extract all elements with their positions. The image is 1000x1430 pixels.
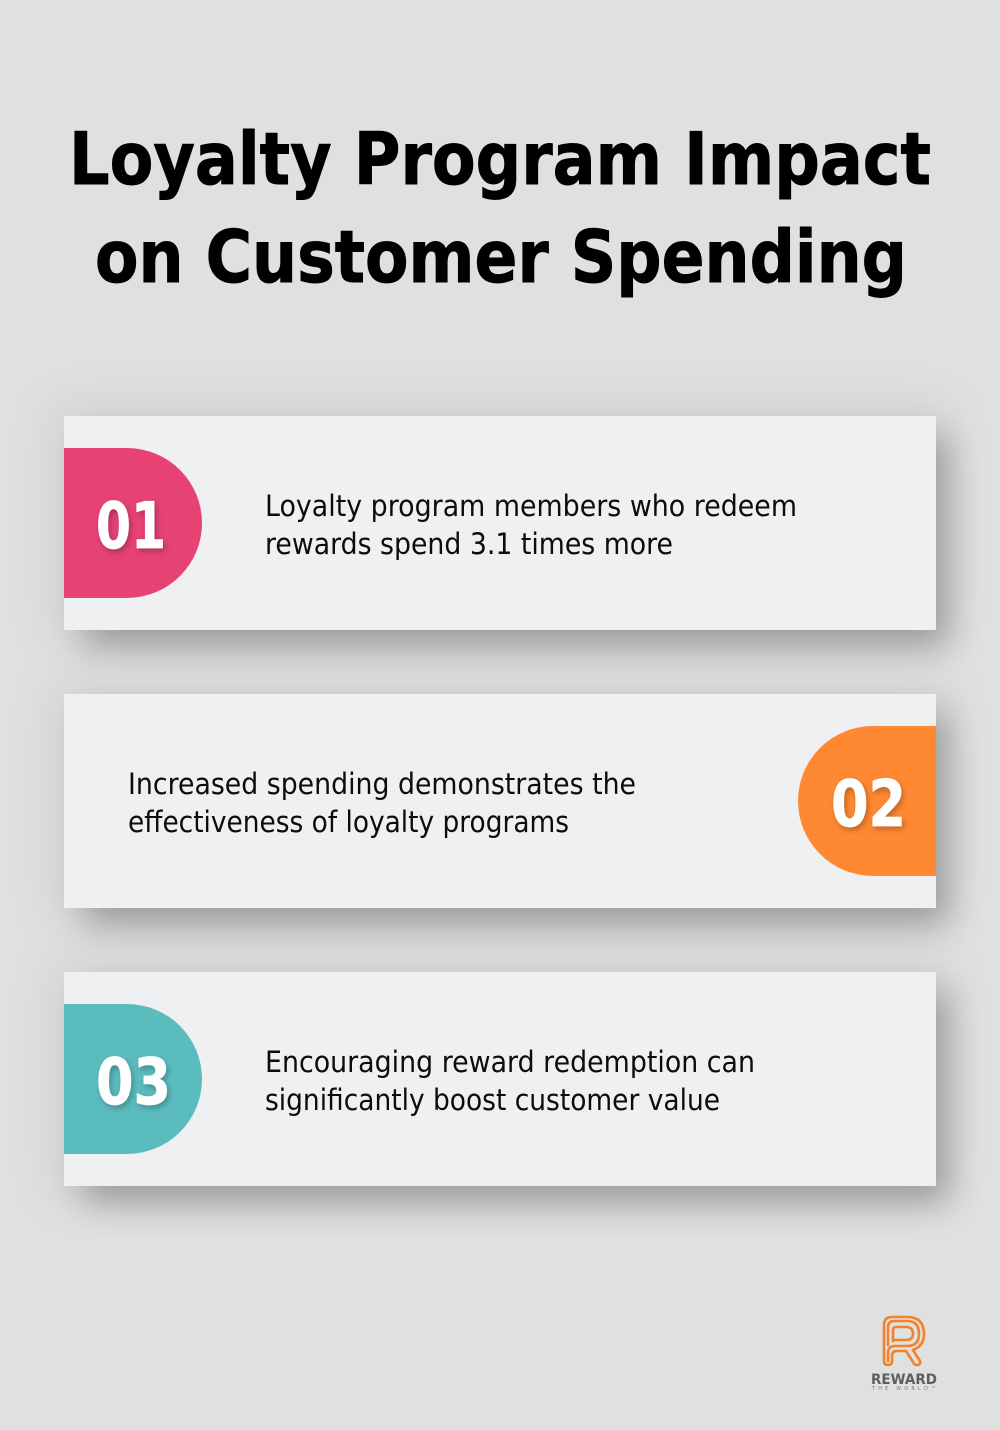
wordmark: REWARD — [871, 1372, 937, 1388]
title — [69, 117, 931, 299]
badge: 01 — [64, 448, 202, 598]
badge: 02 — [798, 726, 936, 876]
text: step 02: Increased spending demonstrates the — [128, 767, 636, 801]
panel: step 01 — [48, 400, 952, 646]
icon: R mark — [884, 1317, 924, 1365]
badge: 03 — [64, 1004, 202, 1154]
text: step 02 — [128, 767, 636, 839]
text: step 03: significantly boost customer value — [265, 1083, 720, 1117]
tagline: THE WORLD™ — [871, 1386, 936, 1392]
text: step 01: rewards spend 3.1 times more — [265, 527, 673, 561]
title: on Customer Spending — [95, 215, 907, 299]
panel: step 02 — [48, 678, 952, 924]
logo: Reward the World — [871, 1317, 937, 1392]
badge: 02: 02 — [831, 768, 906, 842]
panel: step 03 — [48, 956, 952, 1202]
text: step 01 — [265, 489, 797, 561]
badge: 03: 03 — [96, 1046, 171, 1120]
text: step 02: effectiveness of loyalty programs — [128, 805, 569, 839]
badge: 01: 01 — [96, 490, 166, 564]
text: step 03: Encouraging reward redemption can — [265, 1045, 755, 1079]
text: step 03 — [265, 1045, 755, 1117]
text: step 01: Loyalty program members who redeem — [265, 489, 797, 523]
